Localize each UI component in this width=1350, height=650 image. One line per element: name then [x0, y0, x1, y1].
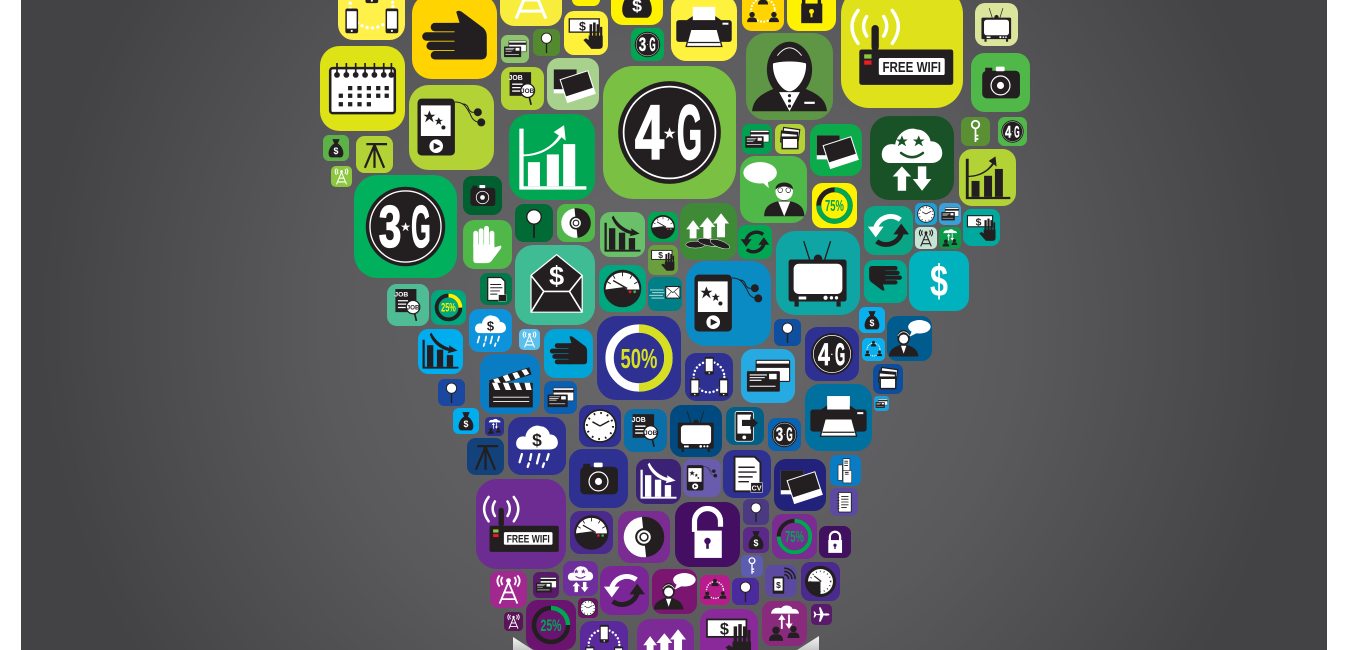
- tile: 3G blue: G: [786, 425, 793, 446]
- tile: camera navy: [569, 449, 628, 508]
- tile: 3G blue: 3: [776, 425, 783, 446]
- tile: tower light blue: [519, 329, 540, 350]
- tile: hand: [412, 0, 497, 79]
- tile: cards purple: [533, 572, 559, 598]
- tile: magnifier: [533, 29, 560, 56]
- tile: money hand purple: [700, 609, 758, 650]
- tile: recycle small: [738, 225, 772, 259]
- tile: job search blue: [624, 409, 667, 452]
- tile: 4G navy: [805, 327, 859, 381]
- tile: job search teal: [387, 284, 429, 326]
- tile: photos green: [810, 124, 862, 176]
- tile: 75 percent purple: 75%: [785, 529, 804, 546]
- tile: clock navy: [579, 405, 621, 447]
- tile: printer blue: [805, 384, 872, 451]
- tile: media player: [409, 85, 494, 170]
- tile: recycle purple: [600, 566, 649, 615]
- tile: magnifier indigo: [732, 578, 759, 605]
- tile: magnifier navy: [438, 379, 465, 406]
- tile: moneybag blue: [859, 307, 885, 333]
- tile: flying envelope: [648, 277, 682, 311]
- tile: camera dark: [463, 176, 502, 215]
- tile: disc purple: [618, 511, 670, 563]
- tile: 3G large: ★: [401, 223, 410, 234]
- tile: 4G large: G: [677, 90, 702, 176]
- tile: 4G large: ★: [664, 126, 676, 141]
- tile: moneybag violet: [743, 527, 769, 553]
- tile: job search: JOB: [509, 75, 523, 82]
- tile: cards light blue: [741, 349, 795, 403]
- tile: 25 percent plum: [526, 600, 576, 650]
- tile: key blue: [741, 555, 763, 577]
- tile: rising chart: [509, 114, 595, 200]
- tile: key green: [961, 117, 990, 146]
- tile: job search teal: JOB: [394, 292, 408, 299]
- tile: free wifi: [841, 0, 963, 108]
- tile: money rain blue: [469, 309, 512, 352]
- tile: photo stack: [775, 124, 805, 154]
- tile: job search teal: JOB: [407, 305, 420, 312]
- tile: cards blue: [939, 203, 961, 225]
- tile: 4G large: 4: [635, 90, 664, 176]
- tile: money hand teal: $: [976, 217, 982, 228]
- tile: money hand olive: [648, 245, 678, 275]
- tile: tower small: [331, 166, 352, 187]
- tile: printer yellow: [671, 0, 737, 61]
- tile: clock plum: [578, 598, 598, 618]
- tile: envelope dollar: [515, 245, 595, 325]
- tile: money rain navy: [508, 417, 566, 475]
- tile: coins and arrows: [680, 203, 737, 260]
- tile: 4G small green: ·: [1012, 129, 1013, 134]
- tile: moneybag cyan: $: [464, 419, 469, 429]
- tile: cards dark blue: [544, 381, 577, 414]
- tile: money hand purple: $: [720, 621, 729, 639]
- tile: hand blue: [544, 329, 593, 378]
- tile: money hand yellow: $: [579, 19, 586, 33]
- tile: gauge violet: [570, 511, 613, 554]
- tile: 3G large: [354, 175, 457, 278]
- tile: falling chart green: [600, 212, 645, 257]
- tile: 3G small green: [631, 28, 664, 61]
- tile: phones: [338, 0, 405, 40]
- tile: media player lilac: [683, 459, 721, 497]
- tile: hand teal: [864, 260, 907, 303]
- tile: open padlock: [675, 502, 740, 567]
- tile: money hand teal: [963, 209, 1000, 246]
- tile: recycle teal: [864, 206, 913, 255]
- tile: magnifier dark green: [515, 204, 553, 242]
- tile: moneybag small: [323, 135, 349, 161]
- tile: people magenta: [700, 575, 730, 605]
- tile: 50 percent: [597, 316, 681, 400]
- tile: gauge green: [648, 212, 678, 242]
- tile: 3G small green: G: [649, 35, 656, 56]
- tile: people gold: [742, 0, 784, 31]
- tile: 4G small green: 4: [1005, 122, 1012, 141]
- tile: 25 percent teal: [431, 290, 466, 325]
- tile: job search blue: JOB: [632, 417, 646, 424]
- tile: 4G small green: G: [1014, 122, 1020, 141]
- tile: phone signal: [765, 565, 797, 597]
- tile: tower magenta: [490, 571, 527, 608]
- tile: media player blue: [686, 261, 771, 346]
- tile: camera green: [971, 53, 1030, 112]
- tile: tv navy: [670, 405, 722, 457]
- tile: tripod navy: [467, 438, 504, 475]
- tile: support woman: [746, 33, 833, 120]
- tile: 3G small green: 3: [639, 35, 646, 56]
- tile: envelope dollar: $: [549, 260, 564, 291]
- tile: CV document: CV: [752, 483, 762, 492]
- tile: tower plum: [504, 612, 523, 631]
- tile: money rain blue: $: [487, 319, 494, 334]
- tile: money hand olive: $: [658, 250, 663, 260]
- tile: cards tiny: [874, 396, 889, 411]
- tile: photo stack blue: [873, 364, 903, 394]
- tile: 25 percent plum: 25%: [540, 616, 562, 635]
- tile: falling chart blue: [418, 329, 463, 374]
- tile: magnifier blue: [774, 319, 801, 346]
- tile: moneybag yellow: [611, 0, 663, 25]
- tile: phone signal: $: [776, 580, 781, 590]
- tile: cloud people plum: [762, 601, 807, 646]
- tile: 3G large: 3: [379, 193, 401, 260]
- tile: free wifi: FREE WIFI: [882, 60, 941, 76]
- tile: 4G navy: 4: [818, 337, 830, 372]
- tile: cloud people green: [939, 227, 961, 249]
- tile: moneybag violet: $: [754, 538, 759, 548]
- tile: support blue: [887, 316, 932, 361]
- tile: 25 percent teal: 25%: [441, 301, 456, 315]
- tile: free wifi purple: [476, 479, 566, 569]
- tile: fax: [830, 455, 861, 486]
- tile: job search blue: JOB: [644, 430, 658, 437]
- tile: phone arrow: [726, 407, 764, 445]
- tile: tv teal: [776, 231, 860, 315]
- tile: 75 percent purple: [772, 514, 817, 559]
- tile: money hand yellow: [564, 11, 608, 55]
- tile: gauge teal: [599, 265, 646, 312]
- tile: free wifi purple: FREE WIFI: [507, 533, 550, 545]
- tile: rising chart lime: [959, 149, 1016, 206]
- tile: 3G blue: [768, 418, 801, 451]
- tile: support magenta: [652, 569, 697, 614]
- tile: calendar: [320, 46, 405, 131]
- tile: tripod: [356, 136, 393, 173]
- tile: moneybag blue: $: [870, 318, 875, 328]
- tile: padlock purple: [819, 526, 851, 558]
- tile: tv light: [975, 3, 1018, 46]
- tile: document green: [480, 273, 512, 305]
- tile: moneybag small: $: [334, 146, 339, 156]
- tile: phones navy: [685, 353, 733, 401]
- tile: 3G small green: ·: [647, 42, 649, 48]
- tile: 4G small green: [998, 117, 1027, 146]
- tile: cloud upload purple: [563, 561, 598, 596]
- tile: notebook: [830, 488, 858, 516]
- tile: arrows purple: [637, 619, 694, 650]
- tile: cloud people navy: [485, 417, 504, 436]
- tile: CV document: [723, 450, 771, 498]
- tile: man with speech bubble: [740, 156, 807, 223]
- tile: cards: [501, 35, 529, 63]
- tile: job search: JOB: [521, 88, 535, 95]
- icon cluster: [320, 0, 1030, 650]
- tile: 4G navy: G: [835, 337, 845, 372]
- tile: money rain navy: $: [532, 430, 542, 450]
- tile: half clock: [801, 562, 840, 601]
- tile: 4G large: [603, 66, 736, 199]
- tile: moneybag cyan: [453, 408, 479, 434]
- tile: clapperboard: [480, 354, 540, 414]
- tile: lock yellow: [787, 0, 836, 31]
- tile: job search: [501, 67, 544, 110]
- tile: airplane: [811, 604, 832, 625]
- tile: stop hand: [463, 220, 512, 269]
- book pages at the bottom: [513, 636, 819, 650]
- tile: clock blue: [915, 203, 937, 225]
- tile: 75 percent yellow: 75%: [825, 198, 844, 215]
- tile: phones purple: [580, 621, 628, 650]
- tile: dollar: [909, 251, 969, 311]
- tile: cloud upload: [870, 116, 954, 200]
- tile: tower yellow: [500, 0, 562, 26]
- tile: 4G navy: ·: [831, 349, 833, 359]
- tile: 50 percent: 50%: [621, 343, 657, 374]
- tile: magnifier violet: [743, 499, 769, 525]
- tile: cards green: [742, 124, 772, 154]
- tile: 3G blue: ·: [784, 432, 786, 438]
- tile: photos indigo: [774, 459, 826, 511]
- tile: 75 percent yellow: [812, 183, 857, 228]
- tile: falling chart violet: [636, 459, 681, 504]
- tile: tower pale: [915, 227, 937, 249]
- tile: people blue: [862, 338, 885, 361]
- tile: small yellow: [572, 0, 600, 6]
- tile: dollar: $: [930, 257, 948, 306]
- tile: photos light: [547, 58, 599, 110]
- tile: 3G large: G: [411, 193, 431, 260]
- tile: disc green: [557, 204, 595, 242]
